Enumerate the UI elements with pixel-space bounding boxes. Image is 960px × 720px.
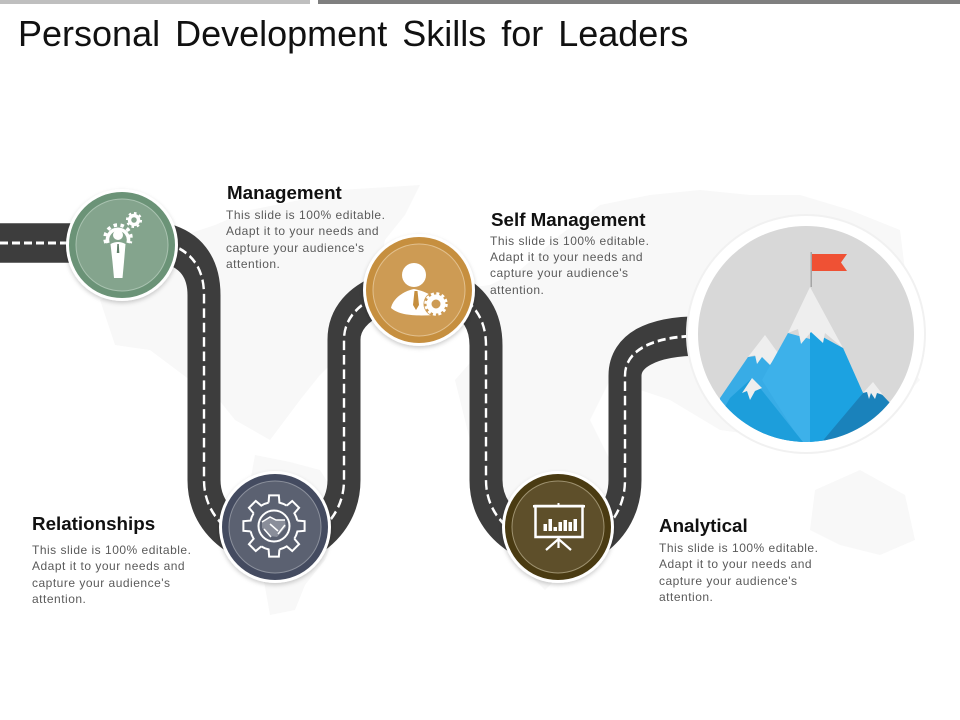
road centre dashes bbox=[0, 243, 700, 536]
main peak bbox=[770, 333, 863, 442]
text block: self management bbox=[490, 209, 649, 297]
text block: analytical: This slide is 100% editable. bbox=[659, 541, 818, 555]
front left mountain bbox=[726, 378, 803, 442]
right mountain bbox=[822, 392, 890, 441]
road surface bbox=[0, 243, 700, 536]
text block: relationships: Adapt it to your needs and bbox=[32, 559, 185, 573]
step circle: relationships bbox=[219, 471, 331, 583]
text block: management bbox=[226, 182, 385, 271]
text block: management: Adapt it to your needs and bbox=[226, 224, 379, 238]
title: Personal Development Skills for Leaders bbox=[18, 13, 688, 54]
step circle: self management bbox=[363, 234, 475, 346]
icon: presentation board with chart bbox=[533, 503, 585, 550]
text block: analytical bbox=[659, 515, 818, 604]
text block: management: capture your audience's bbox=[226, 241, 365, 255]
text block: self management: Self Management bbox=[491, 209, 646, 230]
text block: management: attention. bbox=[226, 257, 280, 271]
winding road bbox=[0, 243, 700, 536]
step circle: management bbox=[66, 189, 178, 301]
text block: self management: capture your audience's bbox=[490, 266, 629, 280]
text block: management: Management bbox=[227, 182, 343, 203]
icon: gear with handshake bbox=[243, 495, 305, 557]
flag bbox=[810, 252, 812, 287]
icon: leader with gears bbox=[105, 213, 141, 278]
text block: relationships bbox=[32, 513, 191, 606]
text block: analytical: attention. bbox=[659, 590, 713, 604]
text block: analytical: Adapt it to your needs and bbox=[659, 557, 812, 571]
text block: self management: This slide is 100% editable. bbox=[490, 234, 649, 248]
main snow cap bbox=[788, 287, 843, 348]
text block: self management: attention. bbox=[490, 283, 544, 297]
left back mountain bbox=[720, 356, 808, 442]
top accent bars bbox=[0, 0, 960, 4]
text block: self management: Adapt it to your needs and bbox=[490, 250, 643, 264]
world map background bbox=[100, 185, 920, 615]
step circle: analytical bbox=[502, 471, 614, 583]
text block: relationships: Relationships bbox=[32, 513, 155, 534]
text block: relationships: attention. bbox=[32, 592, 86, 606]
text block: relationships: capture your audience's bbox=[32, 576, 171, 590]
goal circle: mountain peak bbox=[687, 215, 925, 453]
text block: analytical: Analytical bbox=[659, 515, 748, 536]
text block: management: This slide is 100% editable. bbox=[226, 208, 385, 222]
text block: analytical: capture your audience's bbox=[659, 574, 798, 588]
text block: relationships: This slide is 100% editable. bbox=[32, 543, 191, 557]
icon: person with gear bbox=[391, 263, 448, 316]
